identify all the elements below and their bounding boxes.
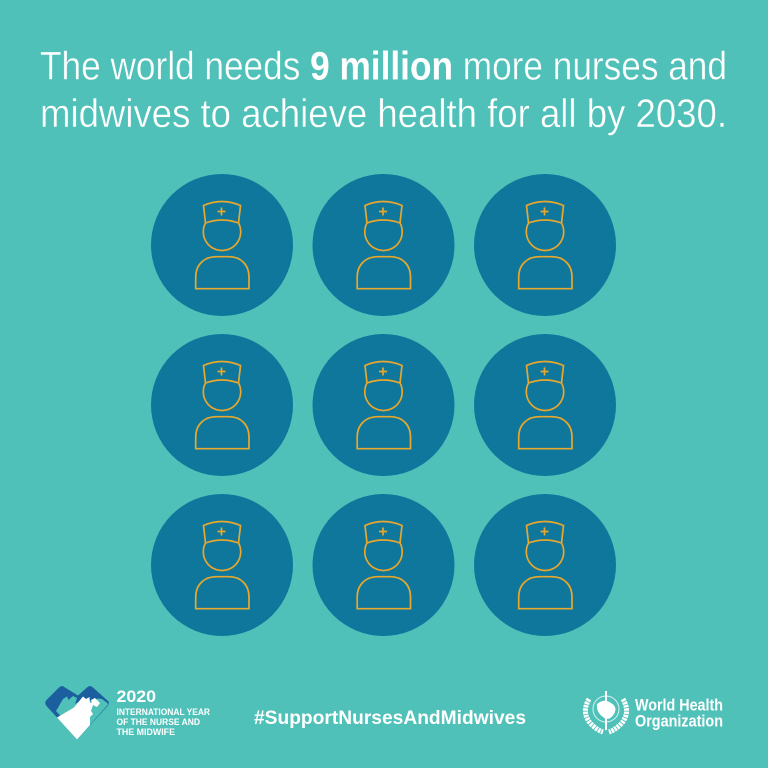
nurse icon grid [151, 174, 616, 636]
logo text: 2020 [116, 687, 156, 706]
icon: nurse row 2 column 1 [151, 334, 293, 476]
icon: nurse row 2 column 3 [474, 334, 616, 476]
icon: nurse row 3 column 2 [312, 494, 454, 636]
icon: heart with hands [45, 686, 109, 740]
icon: nurse row 1 column 1 [151, 174, 293, 316]
organization name [635, 696, 723, 730]
title [40, 44, 727, 136]
logo text: THE MIDWIFE [116, 727, 175, 738]
logo: World Health Organization [585, 691, 723, 732]
logo text: INTERNATIONAL YEAR [116, 707, 210, 718]
icon: nurse row 3 column 3 [474, 494, 616, 636]
icon: WHO emblem [585, 691, 627, 732]
icon: nurse row 3 column 1 [151, 494, 293, 636]
logo: International Year of the Nurse and the Midwife [45, 686, 210, 740]
title: midwives to achieve health for all by 2030. [40, 92, 727, 136]
logo text: OF THE NURSE AND [116, 717, 200, 728]
icon: nurse row 2 column 2 [312, 334, 454, 476]
icon: nurse row 1 column 3 [474, 174, 616, 316]
organization name: World Health [635, 696, 723, 714]
title: The world needs 9 million more nurses and [40, 44, 727, 88]
icon: nurse row 1 column 2 [312, 174, 454, 316]
logo text [116, 687, 210, 738]
organization name: Organization [635, 712, 723, 730]
hashtag: #SupportNursesAndMidwives [254, 707, 526, 729]
